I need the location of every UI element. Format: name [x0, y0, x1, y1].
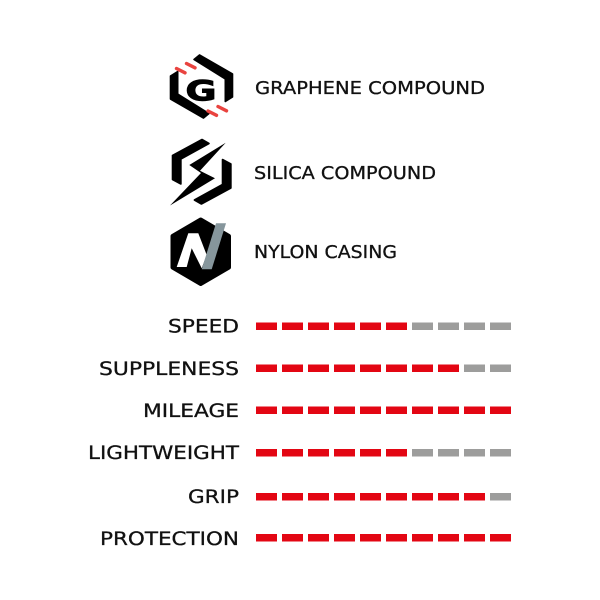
rating row: mileage: MILEAGE [143, 400, 239, 422]
icon: silica compound [170, 140, 231, 206]
rating row: lightweight [88, 442, 511, 464]
rating row: mileage [143, 400, 511, 422]
rating row: speed: SPEED [168, 316, 239, 338]
rating row: speed [168, 316, 511, 338]
rating row: grip [188, 486, 511, 508]
icon: graphene compound [170, 55, 232, 118]
icon: graphene compound: G [186, 74, 216, 107]
rating row: lightweight: LIGHTWEIGHT [88, 442, 239, 464]
rating row: grip: GRIP [188, 486, 239, 508]
rating row: suppleness: SUPPLENESS [99, 358, 239, 380]
rating row: suppleness [99, 358, 511, 380]
rating row: protection [100, 528, 511, 550]
rating row: protection: PROTECTION [100, 528, 239, 550]
label: nylon casing: NYLON CASING [254, 242, 397, 263]
icon: nylon casing [172, 220, 229, 284]
label: graphene compound: GRAPHENE COMPOUND [255, 78, 485, 99]
label: silica compound: SILICA COMPOUND [254, 163, 436, 184]
